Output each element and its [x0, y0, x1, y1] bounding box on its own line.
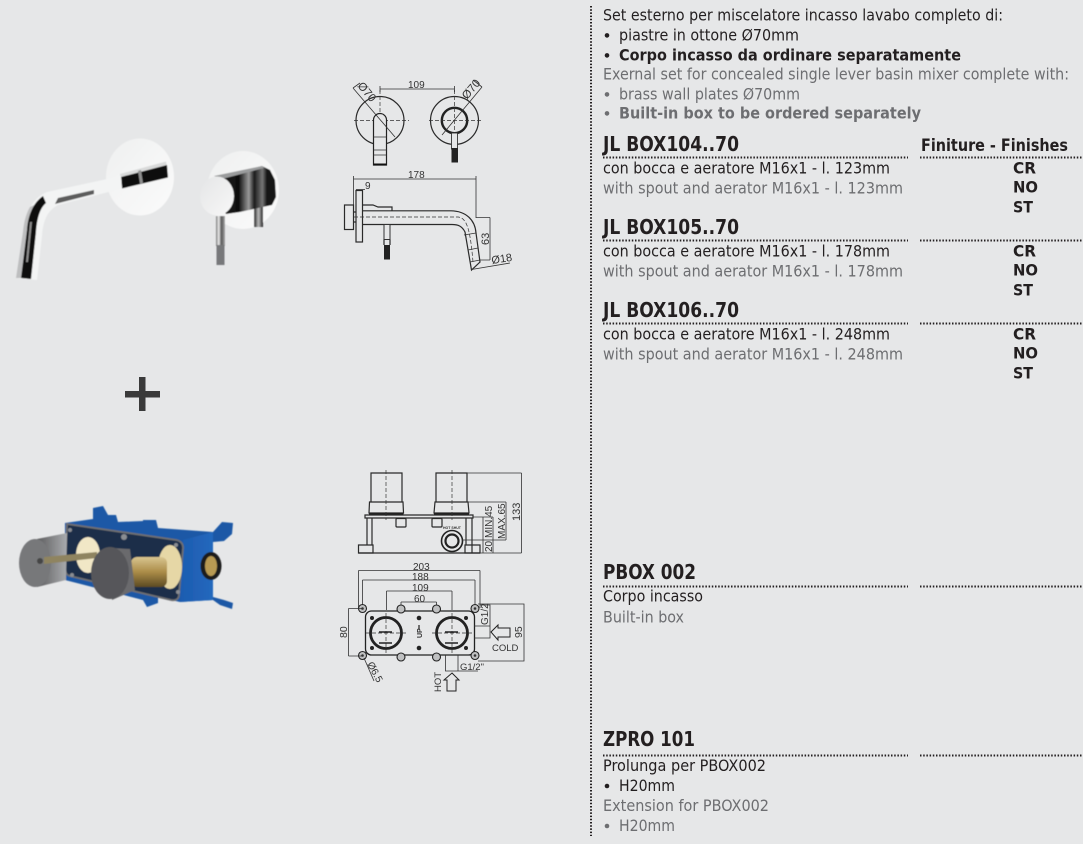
product: JL BOX104..70: JL BOX104..70 — [602, 132, 739, 156]
spout arm — [16, 176, 122, 280]
description english: Built-in box to be ordered separately — [619, 103, 922, 122]
product: JL BOX105..70: NO — [1013, 260, 1038, 280]
up marker: UP — [417, 628, 424, 638]
width dimensions: 188 — [412, 572, 429, 583]
product: PBOX 002 — [603, 560, 1083, 626]
product: JL BOX106..70 — [602, 298, 1083, 382]
product: JL BOX104..70 — [602, 132, 1083, 216]
brass cartridge — [131, 557, 167, 587]
right valve circle — [432, 613, 472, 653]
lever rod — [216, 216, 225, 246]
dimension Ø18 — [472, 252, 513, 270]
product: ZPRO 101: H20mm — [619, 776, 675, 795]
product: PBOX 002: PBOX 002 — [603, 560, 696, 584]
lever stem — [254, 205, 263, 227]
box plate with lugs — [358, 604, 479, 661]
dimension 80 — [338, 608, 362, 656]
right front view: Ø70 — [460, 78, 483, 102]
vertical dotted divider — [590, 6, 592, 836]
front frame — [65, 524, 183, 600]
dimension 178: 178 — [408, 170, 425, 181]
description italian: Set esterno per miscelatore incasso lavabo completo di: — [603, 5, 1003, 24]
product: JL BOX105..70: CR — [1013, 242, 1036, 260]
width dimensions: 60 — [414, 594, 426, 605]
box body — [358, 515, 480, 553]
description english: brass wall plates Ø70mm — [619, 84, 800, 103]
dimension 80: 80 — [338, 626, 350, 638]
left valve circle — [366, 613, 406, 653]
width dimensions: 109 — [412, 583, 429, 594]
product: JL BOX105..70 — [602, 215, 1083, 300]
product: ZPRO 101 — [603, 727, 1083, 835]
G1/2 and cold inlet — [474, 603, 525, 661]
description english — [603, 64, 1069, 122]
technical drawing: box front view — [338, 562, 525, 692]
frame screws — [68, 528, 180, 594]
product: JL BOX104..70: con bocca e aeratore M16x1 - l. 123mm — [603, 158, 890, 178]
product: JL BOX104..70: Finiture - Finishes — [921, 136, 1068, 156]
description english: Exernal set for concealed single lever basin mixer complete with: — [603, 64, 1069, 83]
G1/2 and cold inlet: G1/2 — [480, 603, 491, 625]
technical drawing: side view — [344, 170, 513, 270]
description italian — [603, 5, 1003, 64]
dimension 9 — [356, 181, 371, 192]
valve caps — [369, 470, 469, 520]
wall plate and box — [344, 190, 392, 260]
inlet port — [200, 552, 222, 580]
dimension 9: 9 — [365, 181, 371, 192]
product: JL BOX105..70: JL BOX105..70 — [602, 215, 739, 239]
product: JL BOX106..70: CR — [1013, 324, 1036, 344]
height dimensions — [462, 473, 523, 553]
description italian: Corpo incasso da ordinare separatamente — [619, 45, 961, 64]
G1/2 and cold inlet: COLD — [492, 643, 519, 654]
product: JL BOX105..70: con bocca e aeratore M16x1 - l. 178mm — [603, 242, 890, 260]
height dimensions: 133 — [511, 503, 523, 521]
lever wall plate — [207, 151, 279, 229]
connecting rod — [44, 552, 97, 564]
spout wall plate — [106, 138, 174, 216]
left brass port — [76, 537, 100, 573]
box body: HOT SHUT — [443, 526, 462, 530]
product: ZPRO 101: H20mm — [619, 816, 675, 835]
product: ZPRO 101: Prolunga per PBOX002 — [603, 756, 766, 775]
G1/2 and hot inlet: HOT — [433, 672, 444, 692]
right brass port — [158, 545, 182, 589]
technical drawing: box side view — [358, 470, 523, 553]
up marker — [417, 616, 424, 650]
product: JL BOX106..70: JL BOX106..70 — [602, 298, 739, 322]
dimension Ø18: Ø18 — [491, 252, 513, 267]
left front view: Ø70 — [355, 80, 378, 105]
product: JL BOX105..70: with spout and aerator M16x1 - l. 178mm — [603, 262, 903, 280]
dimension Ø6.5: Ø6.5 — [364, 660, 384, 685]
description italian: piastre in ottone Ø70mm — [619, 25, 799, 44]
product: JL BOX104..70: CR — [1013, 158, 1036, 178]
photo: built-in box — [19, 506, 233, 609]
product: PBOX 002: Built-in box — [603, 608, 684, 626]
height dimensions: MIN.45 — [484, 505, 495, 538]
product: JL BOX105..70: ST — [1013, 280, 1033, 300]
width dimensions — [358, 562, 480, 610]
G1/2 and cold inlet: 95 — [513, 626, 525, 638]
lever knob — [200, 176, 234, 216]
dimension 109: 109 — [408, 80, 425, 91]
spout outline — [362, 211, 480, 270]
product: ZPRO 101: ZPRO 101 — [603, 727, 695, 751]
spout collar — [120, 162, 168, 188]
height dimensions: MAX.65 — [497, 503, 508, 539]
product: JL BOX106..70: NO — [1013, 344, 1038, 362]
dimension 63: 63 — [480, 233, 492, 245]
G1/2 and hot inlet: G1/2" — [460, 662, 484, 673]
dimension 178 — [354, 170, 476, 218]
spout drop shading — [16, 196, 46, 279]
plus sign — [125, 377, 160, 411]
product: JL BOX104..70: ST — [1013, 198, 1033, 216]
product: JL BOX104..70: NO — [1013, 178, 1038, 196]
centre grey knob — [112, 548, 135, 600]
height dimensions: 20 — [484, 540, 495, 552]
dimension 63 — [476, 218, 492, 260]
left grey cylinder — [37, 533, 67, 587]
width dimensions: 203 — [413, 562, 430, 573]
product: JL BOX106..70: with spout and aerator M16x1 - l. 248mm — [603, 344, 903, 364]
photo: wall-mounted mixer with spout — [16, 138, 279, 280]
blue box body — [65, 506, 233, 609]
lever body — [208, 166, 276, 214]
product: PBOX 002: Corpo incasso — [603, 586, 703, 606]
product: JL BOX106..70: con bocca e aeratore M16x1 - l. 248mm — [603, 324, 890, 344]
product: JL BOX106..70: ST — [1013, 364, 1033, 382]
product: ZPRO 101: Extension for PBOX002 — [603, 796, 769, 815]
technical drawing: front views — [353, 78, 483, 165]
G1/2 and hot inlet — [433, 655, 484, 692]
product: JL BOX104..70: with spout and aerator M16x1 - l. 123mm — [603, 178, 903, 198]
